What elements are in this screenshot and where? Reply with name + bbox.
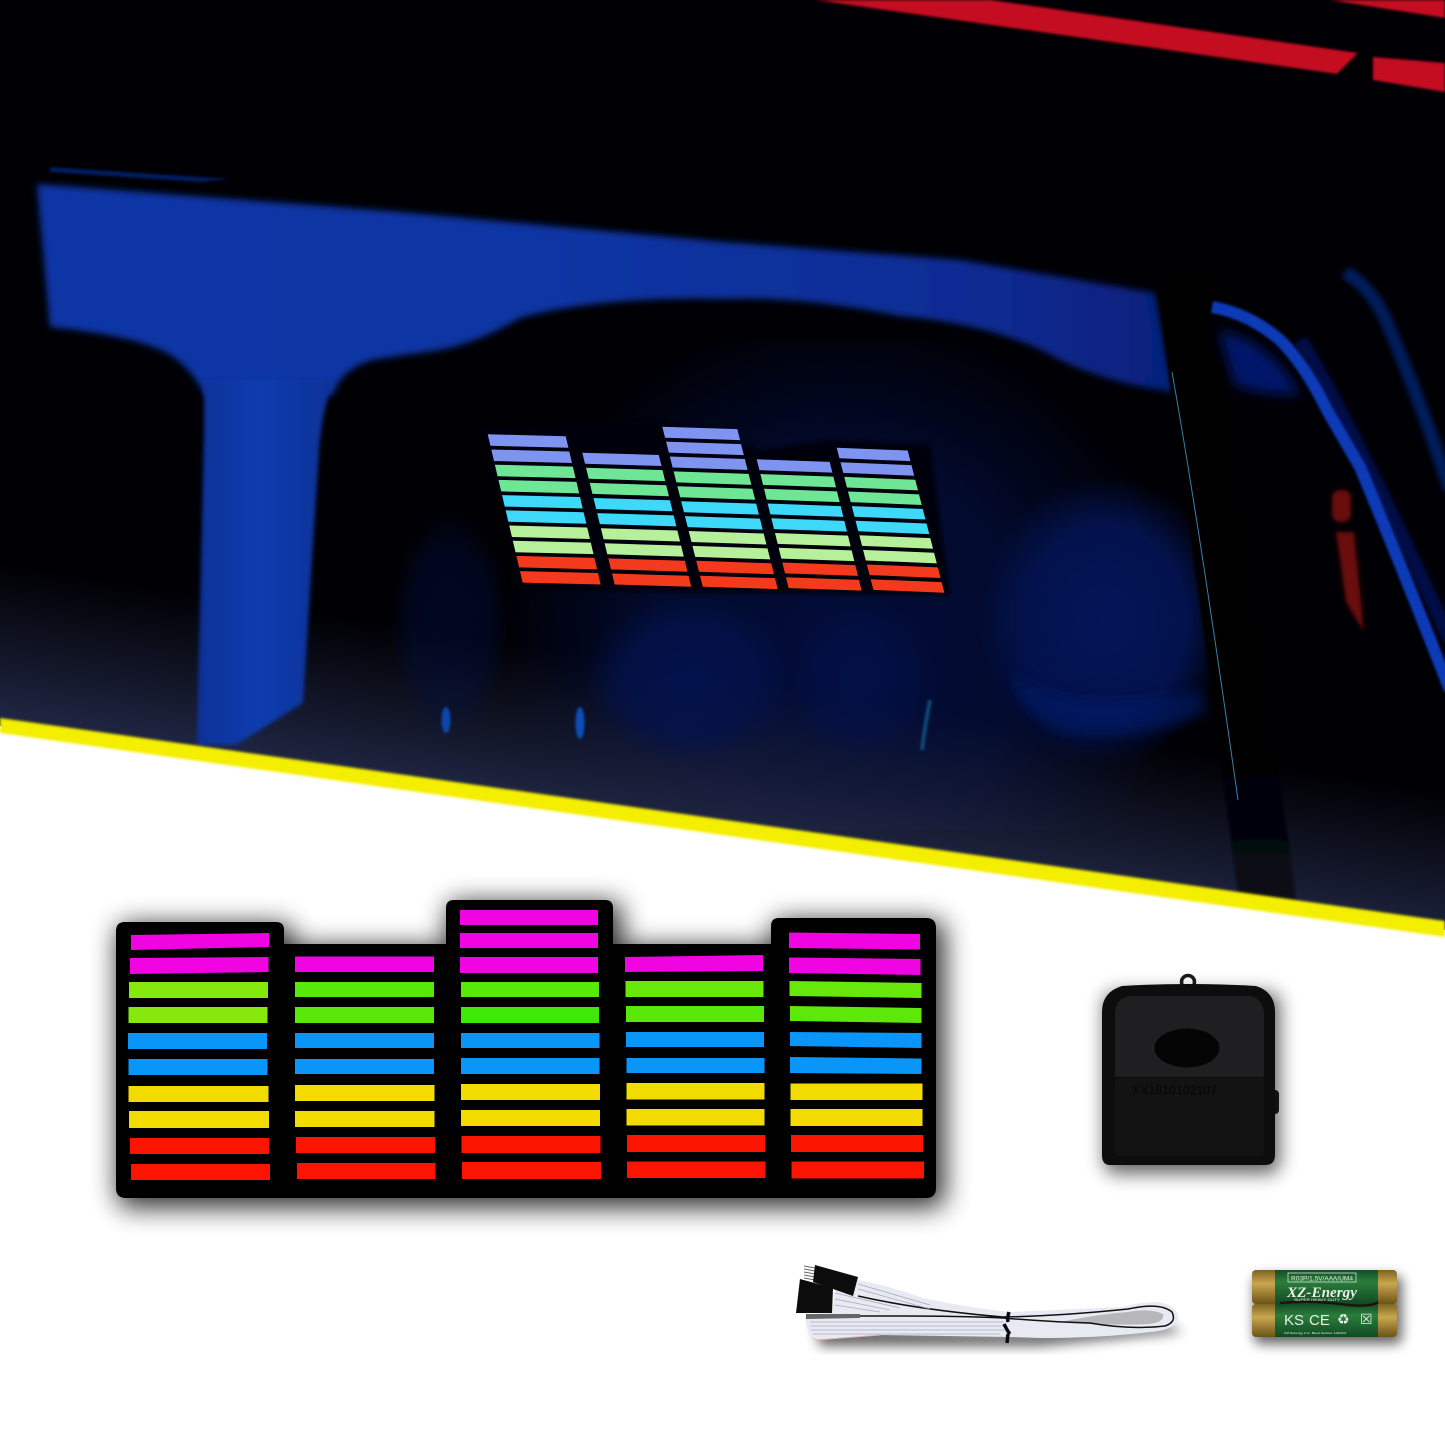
sticker column 3 bars [460,910,601,1179]
ribbon wire lines [810,1284,1004,1334]
lower panel [1115,1078,1264,1156]
product: large equalizer sticker [116,900,941,1204]
upper battery [1252,1270,1397,1304]
blue lit headliner and pillar [37,167,1173,745]
cable drop shadow [815,1325,1182,1346]
battery label text: ♻ [1337,1311,1350,1327]
seat lower highlight [1012,670,1208,736]
sticker column 5 bars [789,932,924,1178]
product: two AAA batteries [1252,1270,1402,1344]
right window blue trim [1212,272,1445,690]
pillar glint [1172,372,1238,800]
product: ribbon cable with connectors [796,1265,1182,1346]
lower haze near yellow edge [0,585,1445,930]
upper panel [1115,996,1264,1077]
box drop shadow [1104,992,1280,1174]
battery label text: CE [1309,1312,1330,1329]
moulded serial text: XX1810102107 [1132,1085,1217,1097]
door pillar [1158,292,1297,900]
battery label text: SUPER HEAVY DUTY [1294,1298,1341,1302]
battery label text [1284,1273,1373,1335]
lower battery [1252,1304,1397,1337]
sticker column 2 bars [295,956,436,1179]
panel: night car interior photo [0,0,1445,940]
battery label text: XZ Energy Inc. Best before 1/2024 [1284,1331,1346,1335]
gray underside at left end [806,1314,860,1319]
battery label text: ☒ [1360,1311,1373,1327]
red tail light reflection [1332,490,1364,632]
navy cabin interior [530,340,1126,828]
side button [1270,1090,1279,1114]
column 1 [488,434,601,585]
battery label text: KS [1284,1312,1304,1329]
battery label text: R03P/1.5V/AAA/UM4 [1291,1276,1353,1282]
cable tie [1004,1312,1010,1343]
red window trim lights [815,0,1445,92]
small floor lights [442,700,930,750]
sticker column 4 bars [625,955,766,1178]
sticker black backing [116,900,936,1198]
loop opening [1060,1310,1163,1325]
ribbon black edges [806,1296,1173,1327]
yellow diagonal divider stripe [0,718,1445,937]
column 4 [757,459,862,591]
column 2 [582,453,691,587]
seam between batteries [1280,1302,1378,1306]
connector A [813,1265,858,1296]
sticker drop shadow [121,906,941,1204]
hanging loop [1182,976,1194,988]
battery label text: XZ-Energy [1286,1285,1357,1301]
column 5 [837,448,944,593]
product: black control box [1102,976,1280,1174]
sensor oval [1154,1028,1220,1068]
battery drop shadow [1254,1276,1402,1344]
connector B [796,1279,833,1313]
sticker column 1 bars [128,933,270,1180]
box body [1102,984,1275,1165]
equalizer on rear window [480,420,950,595]
cable ribbon body [805,1280,1178,1340]
column 3 [662,427,778,589]
header pins [804,1266,815,1280]
pink ribbon edge [816,1335,880,1340]
dark seat silhouette glow [390,475,1230,765]
